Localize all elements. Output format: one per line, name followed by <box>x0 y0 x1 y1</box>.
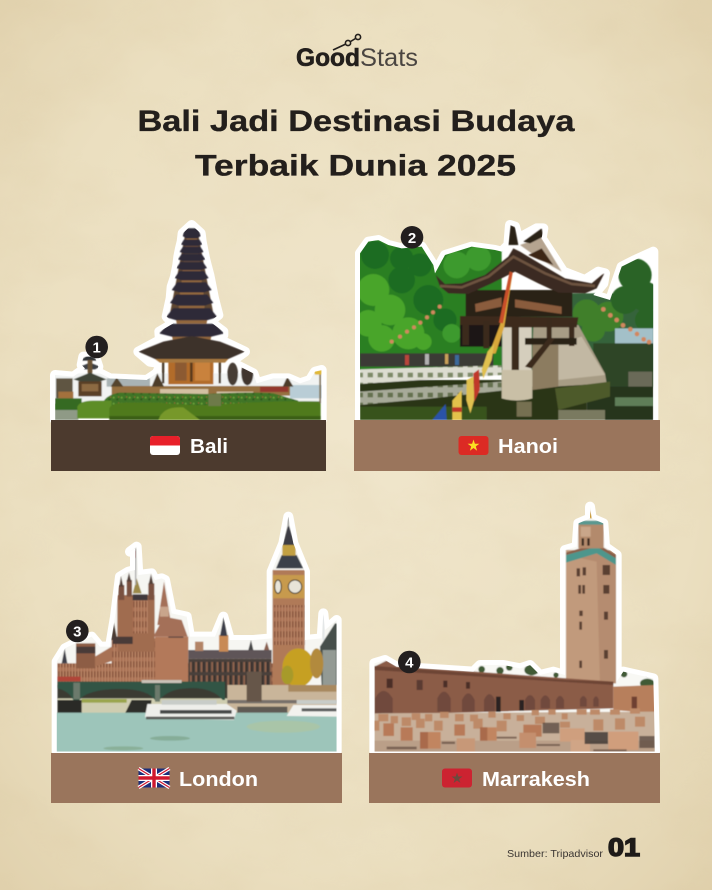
flag: United Kingdom <box>138 768 170 788</box>
boats <box>145 704 237 720</box>
label bar: Bali <box>51 420 326 471</box>
iron fences <box>543 723 559 733</box>
label bar: London <box>51 753 342 803</box>
label bar: Hanoi: Hanoi <box>498 436 558 458</box>
flag: Morocco <box>442 768 472 788</box>
flowers and hedges <box>102 393 298 407</box>
column stumps <box>374 708 645 731</box>
pillar <box>502 322 532 370</box>
page number: 01 <box>608 834 640 862</box>
label bar: Marrakesh <box>369 753 660 803</box>
badge: rank 4: 4 <box>405 654 414 672</box>
pavilion <box>466 290 572 317</box>
badge: rank 2: 2 <box>408 230 416 247</box>
panel: Marrakesh <box>369 503 660 803</box>
logo: GoodStats: Good <box>296 44 360 72</box>
label bar: Bali: Bali <box>190 436 228 458</box>
left small pagoda <box>82 355 97 361</box>
statues and cypress <box>227 363 238 385</box>
water and railing <box>360 380 587 420</box>
badge: rank 1 <box>85 336 108 358</box>
label bar: Hanoi <box>354 420 660 471</box>
embankment <box>225 685 338 713</box>
palms <box>478 665 654 686</box>
title: Bali Jadi Destinasi Budaya <box>138 105 575 138</box>
bridge <box>57 682 225 700</box>
right glass building <box>320 623 337 688</box>
yellow flag <box>319 373 321 403</box>
logo: GoodStats: Stats <box>360 44 418 72</box>
badge: rank 2 <box>401 226 423 249</box>
wall <box>112 386 290 396</box>
background bank under bridge <box>57 685 227 699</box>
title <box>138 105 575 182</box>
badge: rank 3 <box>66 620 89 642</box>
badge: rank 3: 3 <box>73 624 81 640</box>
badge: rank 1: 1 <box>93 340 101 356</box>
main pavilion body <box>168 358 213 384</box>
title: Terbaik Dunia 2025 <box>195 150 516 182</box>
badge: rank 4 <box>398 651 421 673</box>
ground <box>374 712 655 753</box>
logo: GoodStats <box>296 34 418 72</box>
trees right <box>573 299 623 342</box>
prayer flags <box>489 272 513 354</box>
panel: Bali <box>50 225 327 471</box>
label bar: London: London <box>179 769 258 791</box>
roof <box>436 248 604 294</box>
trees left <box>361 241 457 332</box>
Big Ben <box>273 570 305 687</box>
long wall <box>374 661 613 715</box>
water <box>50 713 343 753</box>
illustration: Palace of Westminster and Big Ben <box>50 513 343 753</box>
illustration: Koutoubia Mosque <box>370 503 660 757</box>
label bar: Marrakesh: Marrakesh <box>482 769 590 791</box>
flag: Indonesia <box>150 436 180 455</box>
stone base <box>532 325 607 387</box>
flag: Vietnam <box>458 436 488 455</box>
source note: Sumber: Tripadvisor <box>507 848 604 860</box>
tiered roof <box>170 230 213 313</box>
lanterns <box>390 305 651 344</box>
shadows <box>387 737 627 751</box>
yellow trees <box>282 648 314 687</box>
panel: London <box>50 513 343 803</box>
illustration: One Pillar Pagoda <box>355 225 660 420</box>
illustration: Pura Ulun Danu temple <box>50 225 327 420</box>
minaret <box>566 550 616 683</box>
crowd <box>360 353 493 367</box>
panel: Hanoi <box>354 225 660 471</box>
palace main <box>57 663 274 687</box>
